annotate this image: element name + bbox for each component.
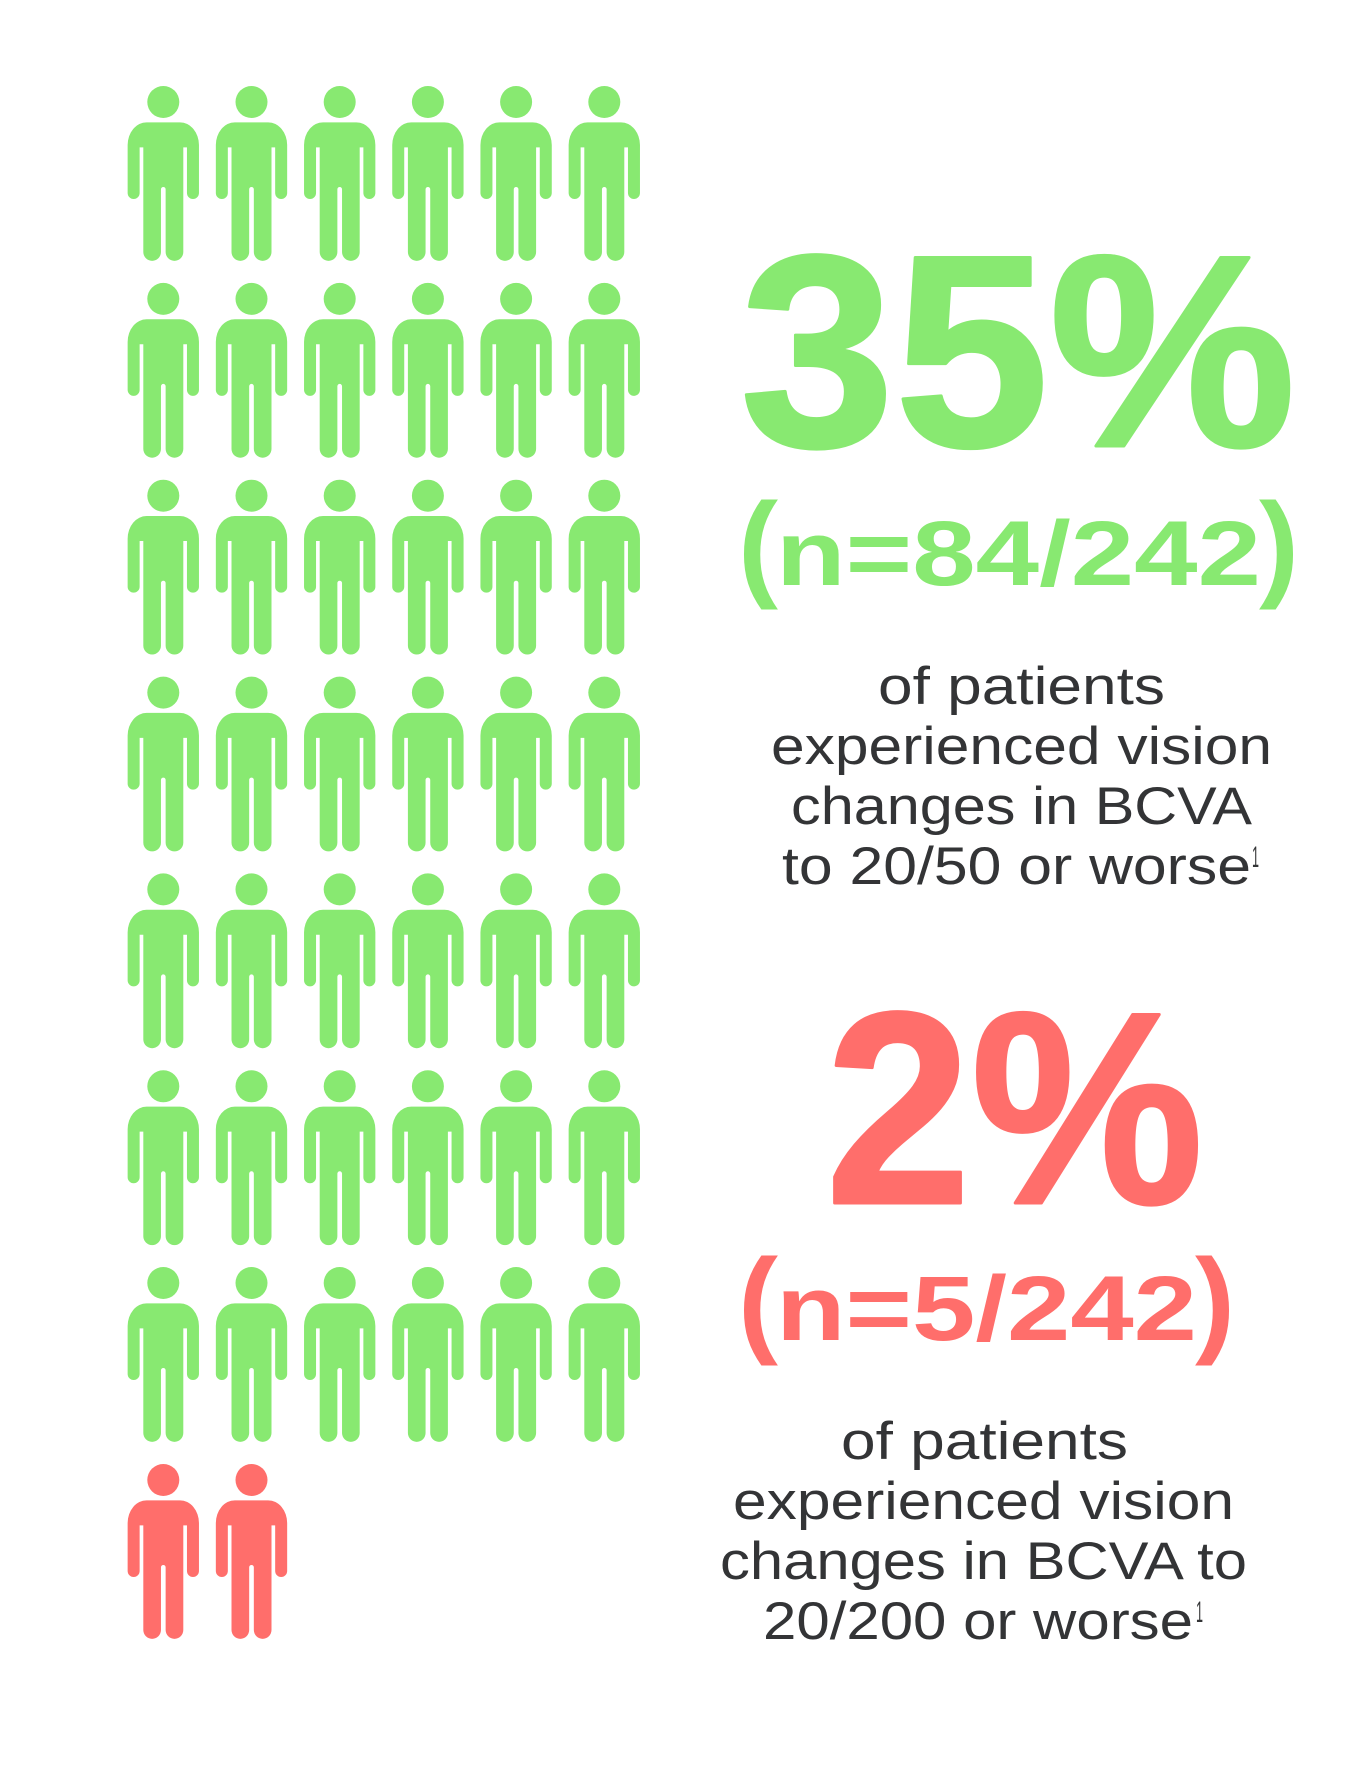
stat detail: n=84/242: ) (1259, 479, 1299, 611)
stat detail: n=84/242: ( (738, 479, 779, 611)
description: 20/200 or worse: 1 (1196, 1596, 1203, 1629)
stat: 2 percent: 2% (826, 956, 1204, 1262)
description: 20/200 or worse: changes in BCVA to (720, 1532, 1247, 1591)
description: 20/200 or worse: experienced vision (733, 1472, 1234, 1531)
description: 20/50 or worse: 1 (1252, 841, 1259, 874)
description: 20/200 or worse: 20/200 or worse (763, 1592, 1193, 1651)
stat detail: n=5/242: n=5/242 (776, 1258, 1197, 1360)
stat detail: n=5/242 (738, 1235, 1235, 1367)
pictogram: people grid (128, 86, 640, 1639)
green people: 42 icons (128, 86, 640, 1442)
red people: 2 icons (128, 1464, 287, 1639)
description: 20/50 or worse: of patients (878, 657, 1165, 716)
description: 20/200 or worse: of patients (841, 1412, 1128, 1471)
description: 20/50 or worse: to 20/50 or worse (782, 837, 1251, 896)
stat detail: n=84/242: n=84/242 (776, 503, 1261, 605)
stat detail: n=5/242: ) (1195, 1235, 1235, 1367)
description: 20/200 or worse (720, 1412, 1247, 1651)
description: 20/50 or worse: changes in BCVA (791, 777, 1253, 836)
stat: 35 percent: 35% (740, 199, 1296, 505)
description: 20/50 or worse (771, 657, 1272, 896)
description: 20/50 or worse: experienced vision (771, 717, 1272, 776)
stat detail: n=84/242 (738, 479, 1299, 611)
stat detail: n=5/242: ( (738, 1235, 779, 1367)
